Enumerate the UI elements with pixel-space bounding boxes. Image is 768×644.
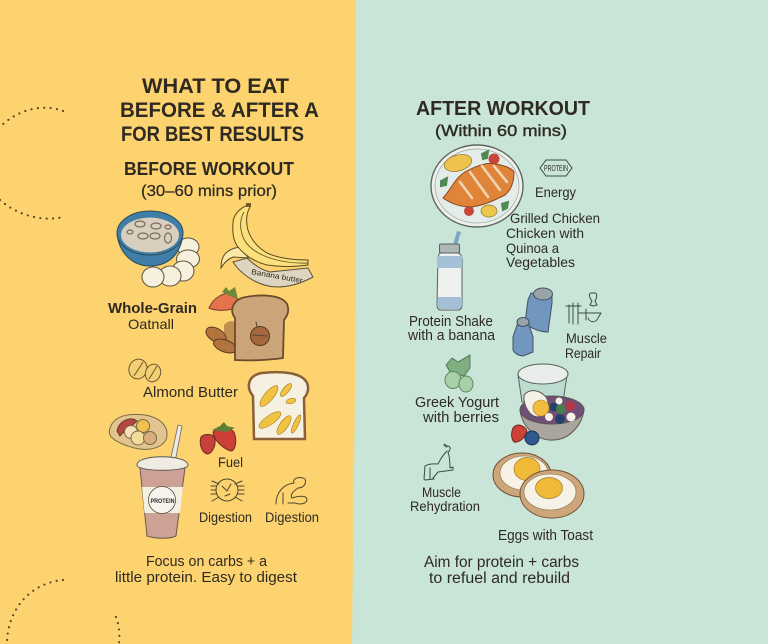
icon: strawberry, almonds and whole-grain bread	[203, 287, 288, 360]
icon: strawberries	[200, 422, 236, 454]
label: whole-grain oatmeal: Oatnall	[128, 316, 174, 332]
icon: banana toast	[249, 372, 308, 439]
icon: protein badge	[540, 160, 572, 176]
label: grilled chicken with quinoa and vegetables: Grilled Chicken	[510, 210, 600, 226]
decorative dotted arcs	[0, 108, 119, 644]
label: almond butter: Almond Butter	[143, 385, 238, 401]
icon: flexing arm	[276, 478, 307, 504]
label: protein shake with a banana: Protein Shake	[409, 314, 493, 330]
heading: after workout	[416, 97, 590, 140]
label: muscle repair	[565, 330, 607, 361]
label: whole-grain oatmeal	[108, 300, 197, 332]
label: greek yogurt with berries: with berries	[422, 410, 499, 426]
label: grilled chicken with quinoa and vegetables: Chicken with	[506, 225, 584, 241]
label: fuel: Fuel	[218, 454, 243, 470]
icon: seated person	[424, 444, 453, 480]
title: WHAT TO EAT	[142, 74, 289, 98]
label: muscle rehydration: Muscle	[422, 485, 461, 500]
icon: banana with ribbon	[221, 203, 313, 287]
icon: yogurt glass and berry bowl	[512, 364, 584, 445]
label: digestion: Digestion	[199, 509, 252, 525]
panel: before workout background	[0, 0, 356, 644]
text: before workout tip: little protein. Easy to digest	[115, 569, 298, 586]
icon: protein smoothie cup: PROTEIN	[150, 498, 175, 505]
label: muscle rehydration: Rehydration	[410, 499, 480, 514]
text: after workout tip: Aim for protein + carbs	[424, 554, 579, 571]
label: muscle repair: Muscle	[566, 330, 607, 346]
icon: walnuts	[126, 357, 163, 384]
label: protein shake with a banana: with a banana	[407, 328, 496, 344]
panel: after workout background	[352, 0, 768, 644]
icon: protein badge: PROTEIN	[544, 164, 568, 173]
text: before workout tip	[115, 553, 298, 586]
text: before workout tip: Focus on carbs + a	[146, 553, 268, 570]
label: muscle rehydration	[410, 485, 480, 514]
label: grilled chicken with quinoa and vegetables: Vegetables	[506, 254, 575, 270]
heading: before workout: BEFORE WORKOUT	[124, 158, 295, 179]
heading: before workout: (30–60 mins prior)	[141, 183, 277, 200]
label: energy: Energy	[535, 184, 576, 200]
label: greek yogurt with berries: Greek Yogurt	[415, 395, 499, 411]
icon: green apples	[445, 355, 473, 392]
heading: before workout	[124, 158, 295, 200]
heading: after workout: (Within 60 mins)	[435, 123, 567, 140]
label: digestion 2: Digestion	[265, 509, 319, 525]
label: greek yogurt with berries	[415, 395, 499, 426]
icon: protein shake bottle	[437, 231, 462, 310]
icon: protein smoothie cup	[137, 425, 188, 538]
text: after workout tip: to refuel and rebuild	[429, 570, 570, 587]
icon: muscle repair dumbbell	[566, 293, 601, 324]
icon: blue shakers	[513, 288, 552, 356]
label: protein shake with a banana	[407, 314, 496, 344]
label: whole-grain oatmeal: Whole-Grain	[108, 300, 197, 317]
icon: grilled chicken plate	[431, 145, 523, 227]
label: eggs with toast: Eggs with Toast	[498, 528, 593, 544]
heading: after workout: AFTER WORKOUT	[416, 97, 590, 120]
ribbon label: Banana butter	[251, 267, 304, 285]
icon: digestion	[211, 479, 244, 501]
label: muscle repair: Repair	[565, 345, 601, 361]
icon: oatmeal bowl with banana slices	[117, 211, 200, 287]
icon: snack plate	[109, 414, 167, 449]
label: grilled chicken with quinoa and vegetables: Quinoa a	[506, 240, 559, 256]
title	[120, 74, 319, 146]
title: BEFORE & AFTER A	[120, 98, 319, 122]
text: after workout tip	[424, 554, 579, 587]
title: FOR BEST RESULTS	[121, 122, 304, 146]
icon: eggs on toast	[493, 453, 584, 518]
label: grilled chicken with quinoa and vegetables	[506, 210, 600, 270]
